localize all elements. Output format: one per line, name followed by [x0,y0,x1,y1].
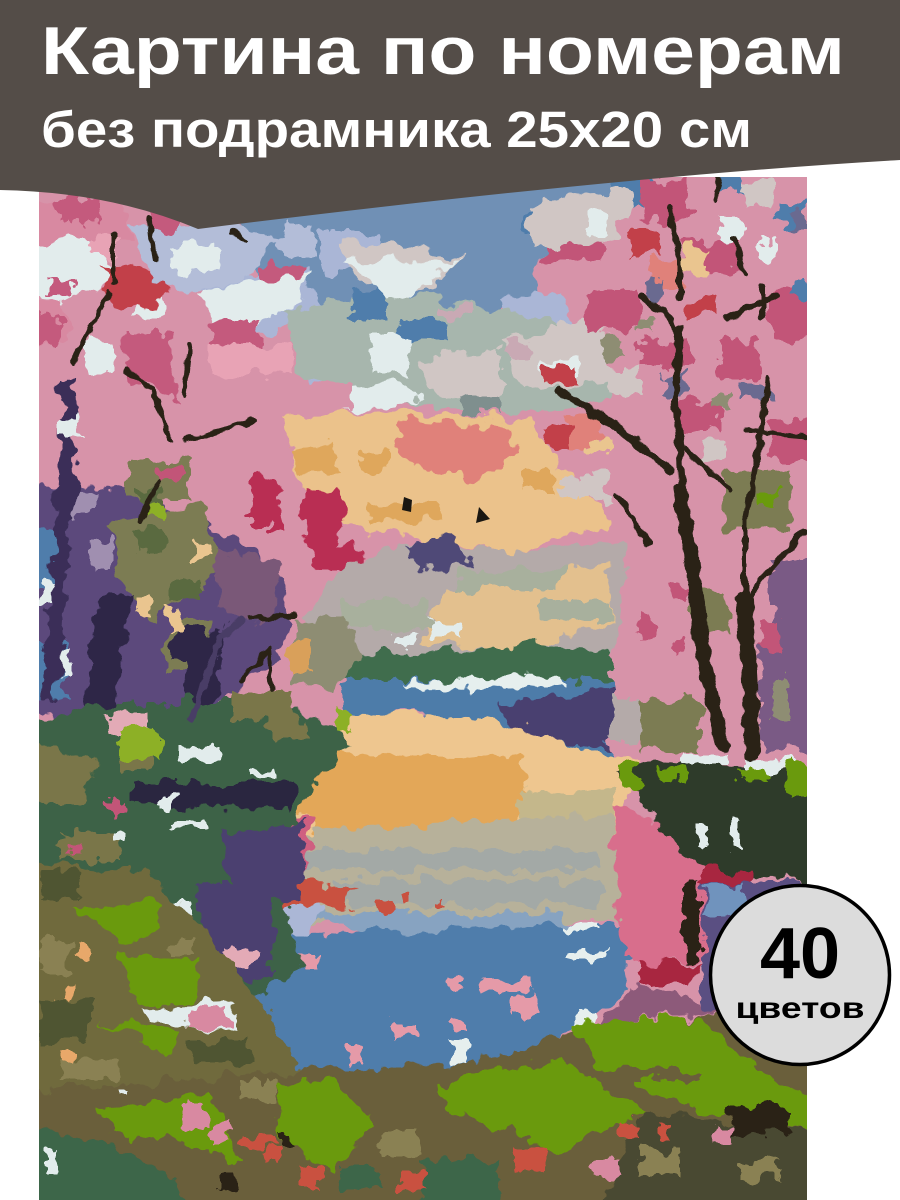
dark red foliage [250,470,365,572]
painting [30,170,815,1200]
birds [402,497,490,523]
water reflection [268,712,642,946]
foreground [30,1000,815,1200]
title: Картина по номерам [41,13,845,89]
lower left meadow [30,862,302,1102]
distant water [345,674,612,762]
sunset glow [285,412,612,552]
header banner [0,0,900,229]
left upper blossom [30,198,315,435]
subtitle: без подрамника 25х20 см [41,101,752,158]
colour count badge [710,886,890,1064]
right bank [602,700,815,1022]
badge label: цветов [736,992,864,1025]
left trees [30,380,362,730]
lake [235,925,632,1084]
right trees [530,177,812,750]
mountains [300,536,625,680]
tree trunks and branches [72,170,805,752]
left bank [30,690,355,1002]
sky and clouds [200,170,650,415]
badge number: 40 [760,914,840,994]
